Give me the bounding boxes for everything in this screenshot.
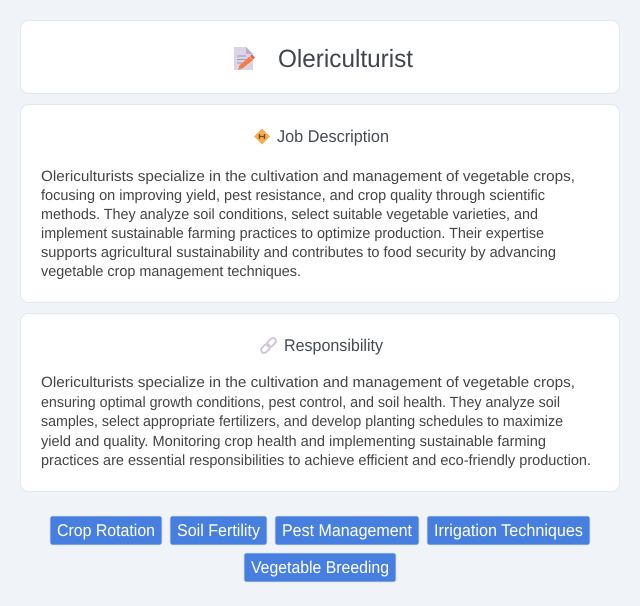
tag: Crop Rotation bbox=[50, 516, 162, 545]
tag: Soil Fertility bbox=[170, 516, 267, 545]
icon: document with pencil bbox=[234, 47, 255, 70]
text block: responsibility: Olericulturists specialize in the cultivation and management of vegetable crops, bbox=[41, 375, 575, 391]
heading: job description: Job Description bbox=[277, 127, 389, 146]
text block: responsibility: ensuring optimal growth conditions, pest control, and soil health. They analyze soil bbox=[41, 395, 560, 411]
tag: Pest Management bbox=[275, 516, 419, 545]
text block: job description: Olericulturists specialize in the cultivation and management of vegetable crops, bbox=[41, 169, 575, 185]
panel: responsibility bbox=[20, 314, 620, 492]
text block: responsibility bbox=[41, 375, 591, 469]
tag: Crop Rotation: Crop Rotation bbox=[57, 521, 155, 540]
tag: Vegetable Breeding bbox=[244, 553, 396, 582]
text block: job description bbox=[41, 169, 575, 280]
tag: Irrigation Techniques: Irrigation Techniques bbox=[434, 521, 583, 540]
icon: link bbox=[260, 337, 277, 354]
text block: job description: implement sustainable farming practices to optimize production. Their expertise bbox=[41, 226, 544, 242]
text block: job description: methods. They analyze soil conditions, select suitable vegetable varieties, and bbox=[41, 207, 538, 223]
heading: responsibility: Responsibility bbox=[284, 336, 383, 355]
text block: job description: focusing on improving yield, pest resistance, and crop quality through scientific bbox=[41, 188, 546, 204]
icon: road sign diamond bbox=[254, 128, 270, 144]
text block: job description: supports agricultural sustainability and contributes to food security by advancing bbox=[41, 245, 556, 261]
panel: job description bbox=[20, 104, 620, 302]
text block: responsibility: practices are essential responsibilities to achieve efficient and eco-friendly production. bbox=[41, 453, 591, 469]
text block: responsibility: samples, select appropriate fertilizers, and develop planting schedules to maximize bbox=[41, 414, 563, 430]
text block: responsibility: yield and quality. Monitoring crop health and implementing sustainable farming bbox=[41, 434, 546, 450]
tag: Vegetable Breeding: Vegetable Breeding bbox=[251, 558, 389, 577]
tag: Pest Management: Pest Management bbox=[282, 521, 412, 540]
tag: Soil Fertility: Soil Fertility bbox=[177, 521, 260, 540]
tag: Irrigation Techniques bbox=[427, 516, 590, 545]
title: Olericulturist bbox=[278, 45, 413, 73]
text block: job description: vegetable crop management techniques. bbox=[41, 264, 301, 280]
panel: title card bbox=[20, 20, 620, 94]
